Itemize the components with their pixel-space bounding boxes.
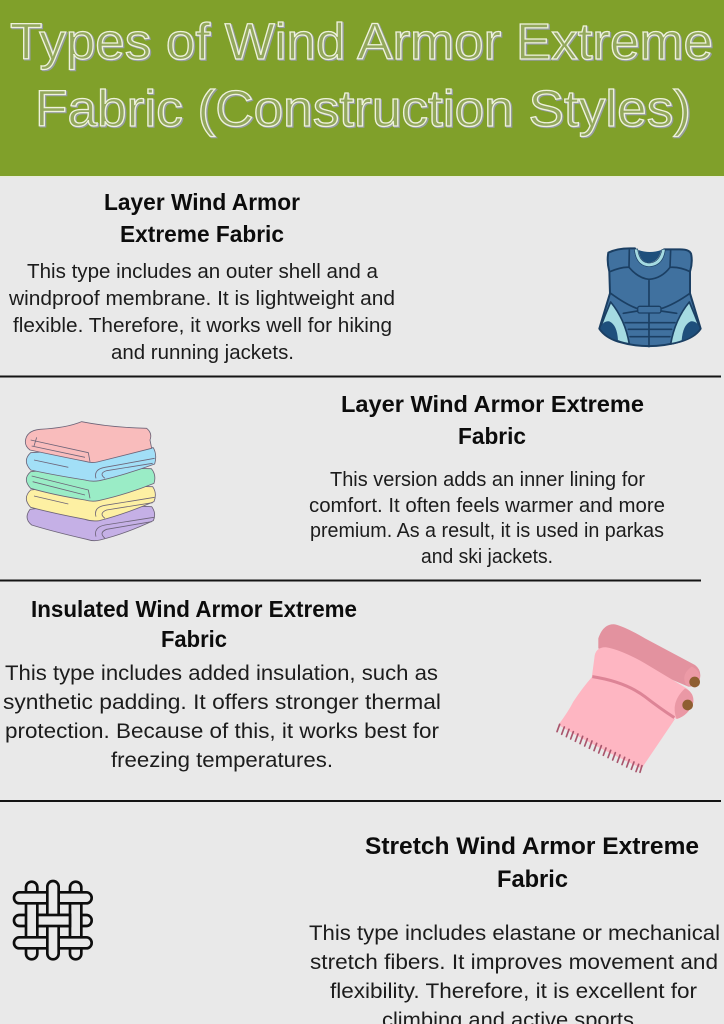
text block: This version adds an inner lining for	[330, 469, 645, 491]
text block: protection. Because of this, it works best for	[5, 720, 439, 743]
text block: premium. As a result, it is used in parkas	[310, 520, 664, 542]
text block	[8, 261, 395, 364]
heading: Insulated Wind Armor Extreme	[31, 596, 357, 622]
panel: stretch fabric	[14, 833, 720, 1024]
text block: flexible. Therefore, it works well for hiking	[13, 315, 392, 337]
text block	[3, 662, 441, 772]
title: Types of Wind Armor Extreme	[11, 14, 714, 71]
panel: layer fabric two	[25, 391, 665, 568]
text block: stretch fibers. It improves movement and	[310, 951, 718, 974]
panel: insulated fabric	[3, 596, 700, 772]
heading: Layer Wind Armor Extreme	[341, 391, 644, 417]
heading	[31, 596, 357, 652]
text block: flexibility. Therefore, it is excellent for	[330, 980, 697, 1003]
heading	[365, 833, 699, 893]
text block	[309, 469, 665, 568]
heading	[104, 189, 300, 247]
text block: This type includes added insulation, such as	[5, 662, 438, 685]
text block: synthetic padding. It offers stronger thermal	[3, 691, 441, 714]
icon: woven fabric pattern	[14, 881, 92, 959]
heading: Fabric	[161, 626, 227, 652]
text block: and running jackets.	[111, 342, 294, 364]
text block: and ski jackets.	[421, 546, 553, 568]
heading: Fabric	[497, 866, 568, 893]
icon: stack of folded pastel towels	[25, 422, 156, 541]
icon: blue body armor vest	[599, 248, 701, 347]
text block: This type includes an outer shell and a	[27, 261, 379, 283]
text block: freezing temperatures.	[111, 749, 333, 772]
heading	[341, 391, 644, 449]
heading: Fabric	[458, 423, 526, 449]
panel: title banner	[0, 0, 724, 178]
title: Fabric (Construction Styles)	[36, 81, 692, 138]
heading: Stretch Wind Armor Extreme	[365, 833, 699, 860]
icon: pink rolled scarf with fringe	[557, 624, 700, 772]
title: Types of Wind Armor Extreme	[10, 13, 713, 70]
panel: layer fabric one	[8, 189, 701, 364]
title	[10, 13, 714, 138]
heading: Extreme Fabric	[120, 221, 284, 247]
text block: comfort. It often feels warmer and more	[309, 495, 665, 517]
text block: windproof membrane. It is lightweight and	[8, 288, 395, 310]
heading: Layer Wind Armor	[104, 189, 300, 215]
title: Fabric (Construction Styles)	[35, 80, 691, 137]
text block: This type includes elastane or mechanical	[309, 922, 720, 945]
text block	[309, 922, 720, 1024]
